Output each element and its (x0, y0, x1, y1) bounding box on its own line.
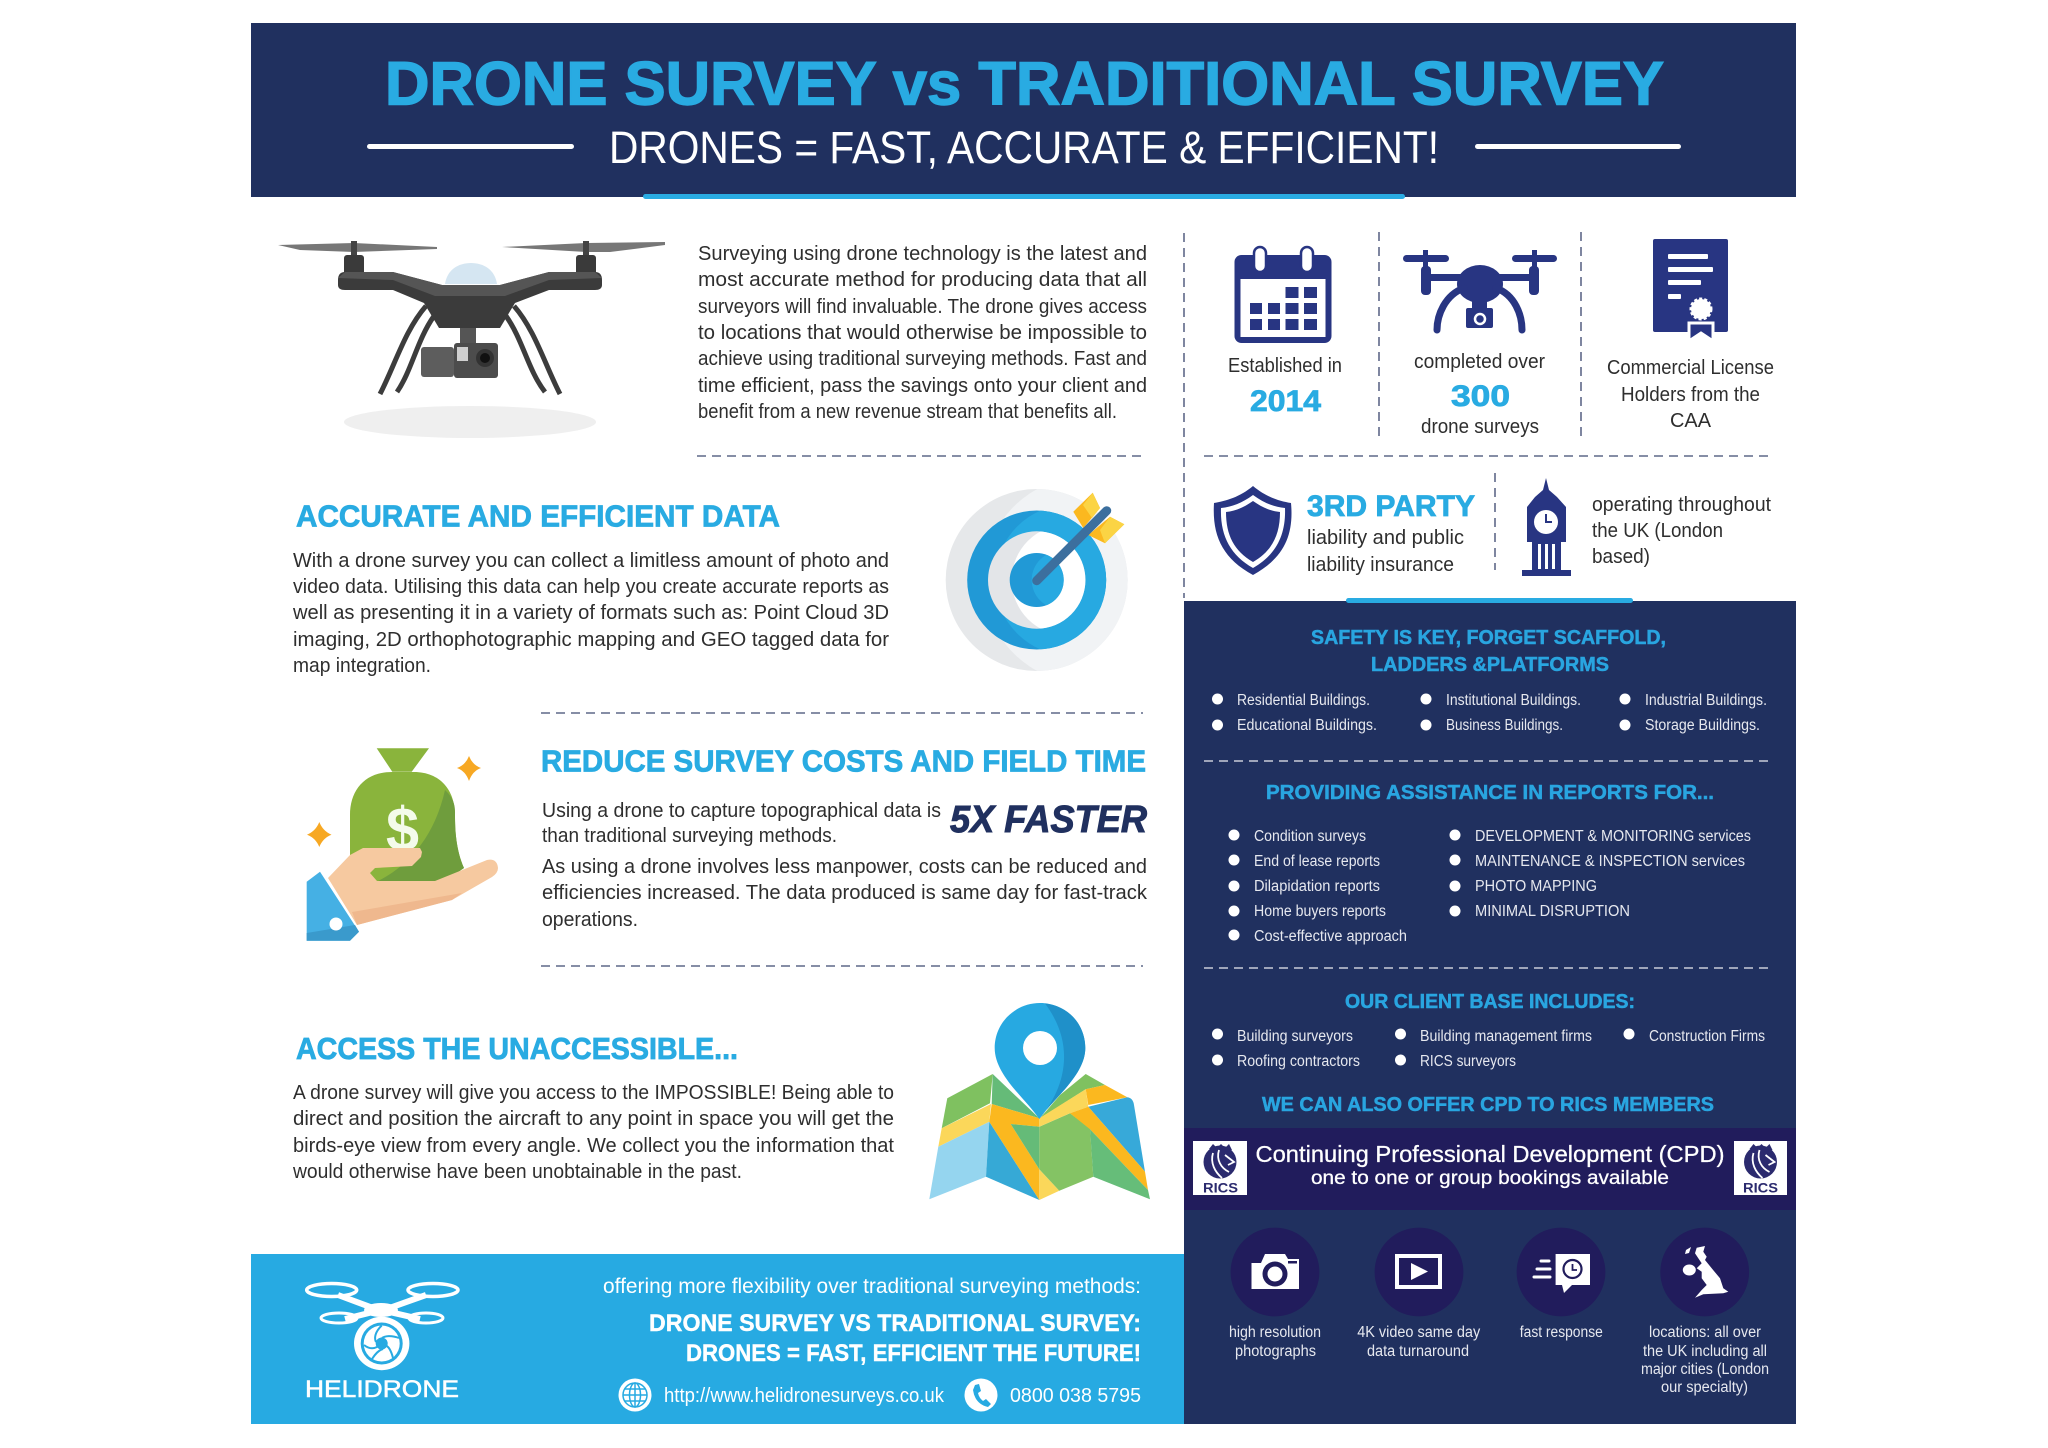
stat: UK coverage: the UK (London (1592, 519, 1723, 542)
text block: intro paragraph: surveyors will find invaluable. The drone gives access (698, 295, 1147, 318)
text block: reduce costs paragraph: than traditional surveying methods. (542, 824, 837, 847)
list: clients: RICS surveyors (1420, 1053, 1516, 1070)
list: report types: MAINTENANCE & INSPECTION services (1475, 853, 1745, 870)
panel: services dark panel (1184, 598, 1796, 1424)
text block: intro paragraph: Surveying using drone technology is the latest and (698, 242, 1147, 265)
heading: safety is key: SAFETY IS KEY, FORGET SCAFFOLD, (1311, 627, 1666, 649)
text block: access paragraph (292, 1081, 894, 1183)
text block: footer message: DRONE SURVEY VS TRADITIONAL SURVEY: (649, 1310, 1141, 1337)
icon: Big Ben (1522, 478, 1571, 576)
text block: footer message: DRONES = FAST, EFFICIENT THE FUTURE! (686, 1340, 1141, 1367)
stat: 3rd party insurance: liability and public (1307, 526, 1464, 549)
list: clients: Construction Firms (1649, 1028, 1765, 1045)
text block: intro paragraph (698, 242, 1147, 423)
text block: reduce costs paragraph (542, 799, 1148, 931)
text block: intro paragraph: achieve using traditional surveying methods. Fast and (698, 347, 1147, 370)
feature: 4K video: 4K video same day (1357, 1324, 1480, 1341)
icon: survey drone (1403, 250, 1557, 330)
feature: UK locations: the UK including all (1643, 1343, 1767, 1360)
stat: established 2014: Established in (1228, 354, 1342, 377)
text block: access paragraph: direct and position the aircraft to any point in space you will get the (293, 1107, 894, 1130)
logo: RICS right: RICS (1743, 1180, 1778, 1196)
title: DRONE SURVEY vs TRADITIONAL SURVEY (385, 50, 1664, 118)
text block: access paragraph: birds-eye view from every angle. We collect you the information that (293, 1134, 894, 1157)
stat: established 2014: 2014 (1250, 385, 1321, 418)
list: building types: Residential Buildings. (1237, 692, 1370, 709)
list: building types: Business Buildings. (1446, 717, 1563, 734)
list: report types: Dilapidation reports (1254, 878, 1380, 895)
icon: phone (964, 1378, 998, 1412)
heading: safety is key (1311, 627, 1666, 676)
list: report types: Cost-effective approach (1254, 928, 1407, 945)
stat: commercial license: Holders from the (1621, 383, 1760, 406)
icon: UK map (1683, 1246, 1728, 1298)
feature: high resolution photographs: high resolution (1229, 1324, 1321, 1341)
stat: 3rd party insurance (1214, 486, 1475, 576)
feature: UK locations (1641, 1228, 1769, 1396)
text block: access paragraph: A drone survey will give you access to the IMPOSSIBLE! Being able to (293, 1081, 894, 1104)
text block: reduce costs paragraph: operations. (542, 908, 638, 931)
heading: providing assistance: PROVIDING ASSISTANCE IN REPORTS FOR... (1266, 782, 1714, 804)
text block: access paragraph: would otherwise have been unobtainable in the past. (292, 1160, 742, 1183)
icon: calendar (1234, 247, 1332, 343)
icon: target with dart (946, 489, 1128, 671)
list: report types: End of lease reports (1254, 853, 1380, 870)
stat: 300 surveys: completed over (1414, 350, 1545, 373)
text: phone number: 0800 038 5795 (1010, 1385, 1141, 1407)
list: clients: Building surveyors (1237, 1028, 1353, 1045)
text: CPD title: Continuing Professional Development (CPD) (1256, 1141, 1724, 1167)
list: clients: Building management firms (1420, 1028, 1592, 1045)
text block: accurate data paragraph (292, 549, 889, 677)
text block: accurate data paragraph: video data. Utilising this data can help you create accurate reports as (293, 575, 889, 598)
feature: 4K video (1357, 1228, 1480, 1360)
list: building types (1212, 692, 1767, 734)
feature: UK locations: major cities (London (1641, 1361, 1769, 1378)
text block: intro paragraph: time efficient, pass the savings onto your client and (698, 374, 1147, 397)
feature: UK locations: our specialty) (1661, 1379, 1748, 1396)
heading: client base: OUR CLIENT BASE INCLUDES: (1345, 991, 1635, 1013)
icon: play (1395, 1254, 1442, 1289)
icon: money bag in hand: $ (386, 796, 419, 865)
text: CPD subtitle: one to one or group bookings available (1311, 1167, 1669, 1189)
list: report types (1228, 828, 1751, 945)
icon: camera (1252, 1254, 1299, 1289)
stat: commercial license (1607, 239, 1774, 432)
list: building types: Educational Buildings. (1237, 717, 1377, 734)
icon: folded map with pin (929, 1003, 1150, 1200)
icon: certificate (1653, 239, 1728, 341)
heading: CPD offer: WE CAN ALSO OFFER CPD TO RICS MEMBERS (1262, 1094, 1714, 1116)
list: report types: Condition surveys (1254, 828, 1366, 845)
text block: footer message: offering more flexibility over traditional surveying methods: (603, 1275, 1141, 1298)
logo: RICS right (1734, 1141, 1787, 1196)
feature: fast response: fast response (1520, 1324, 1603, 1341)
logo: RICS left (1193, 1141, 1247, 1196)
list: report types: PHOTO MAPPING (1475, 878, 1597, 895)
stat: 300 surveys (1403, 250, 1557, 438)
stat: established 2014 (1228, 247, 1342, 418)
heading: safety is key: LADDERS &PLATFORMS (1371, 654, 1609, 676)
text block: footer message (603, 1275, 1141, 1367)
subtitle: DRONES = FAST, ACCURATE & EFFICIENT! (609, 122, 1439, 173)
heading: accurate and efficient data: ACCURATE AND EFFICIENT DATA (296, 498, 780, 534)
list: report types: Home buyers reports (1254, 903, 1386, 920)
icon: globe (618, 1378, 652, 1412)
list: report types: DEVELOPMENT & MONITORING services (1475, 828, 1751, 845)
list: clients (1212, 1028, 1765, 1070)
text block: reduce costs paragraph: As using a drone involves less manpower, costs can be reduced and (542, 855, 1147, 878)
heading: access the unaccessible: ACCESS THE UNACCESSIBLE... (296, 1031, 738, 1066)
icon: camera drone illustration (278, 241, 665, 438)
heading: reduce survey costs: REDUCE SURVEY COSTS AND FIELD TIME (541, 744, 1146, 778)
list: building types: Industrial Buildings. (1645, 692, 1767, 709)
list: building types: Institutional Buildings. (1446, 692, 1581, 709)
icon: shield (1214, 486, 1292, 575)
text block: intro paragraph: to locations that would otherwise be impossible to (698, 321, 1147, 344)
stat: 3rd party insurance: 3RD PARTY (1307, 490, 1475, 523)
stat: UK coverage: based) (1592, 545, 1650, 568)
text block: accurate data paragraph: map integration. (293, 654, 431, 677)
feature: high resolution photographs: photographs (1235, 1343, 1316, 1360)
icon: money bag in hand (307, 748, 498, 941)
stat: 300 surveys: drone surveys (1421, 415, 1539, 438)
stat: UK coverage (1522, 478, 1771, 576)
list: report types: MINIMAL DISRUPTION (1475, 903, 1630, 920)
stat: UK coverage: operating throughout (1592, 493, 1771, 516)
text block: intro paragraph: most accurate method for producing data that all (698, 268, 1147, 291)
panel: header banner (251, 23, 1796, 199)
feature: high resolution photographs (1229, 1228, 1321, 1360)
text block: intro paragraph: benefit from a new revenue stream that benefits all. (698, 400, 1117, 423)
feature: UK locations: locations: all over (1649, 1324, 1761, 1341)
text block: reduce costs paragraph: Using a drone to capture topographical data is (542, 799, 941, 822)
text block: accurate data paragraph: With a drone survey you can collect a limitless amount of photo and (293, 549, 889, 572)
feature: 4K video: data turnaround (1367, 1343, 1469, 1360)
text: website: http://www.helidronesurveys.co.uk (664, 1385, 945, 1407)
callout: 5X faster: 5X FASTER (950, 799, 1148, 841)
stat: 3rd party insurance: liability insurance (1307, 553, 1454, 576)
panel: CPD band (1184, 1128, 1796, 1210)
logo: Helidrone: HELIDRONE (305, 1376, 459, 1403)
stat: commercial license: CAA (1670, 409, 1711, 432)
text block: accurate data paragraph: imaging, 2D orthophotographic mapping and GEO tagged data for (293, 628, 889, 651)
panel: footer banner (251, 1254, 1184, 1424)
stat: 300 surveys: 300 (1451, 380, 1510, 413)
list: building types: Storage Buildings. (1645, 717, 1760, 734)
list: clients: Roofing contractors (1237, 1053, 1360, 1070)
icon: speech bubble clock (1534, 1254, 1590, 1293)
logo: RICS left: RICS (1203, 1180, 1238, 1196)
stat: commercial license: Commercial License (1607, 356, 1774, 379)
text block: accurate data paragraph: well as presenting it in a variety of formats such as: Point Cloud 3D (292, 601, 889, 624)
feature: fast response (1517, 1228, 1605, 1341)
text block: reduce costs paragraph: efficiencies increased. The data produced is same day for fast-track (542, 881, 1148, 904)
logo: Helidrone (305, 1284, 459, 1403)
